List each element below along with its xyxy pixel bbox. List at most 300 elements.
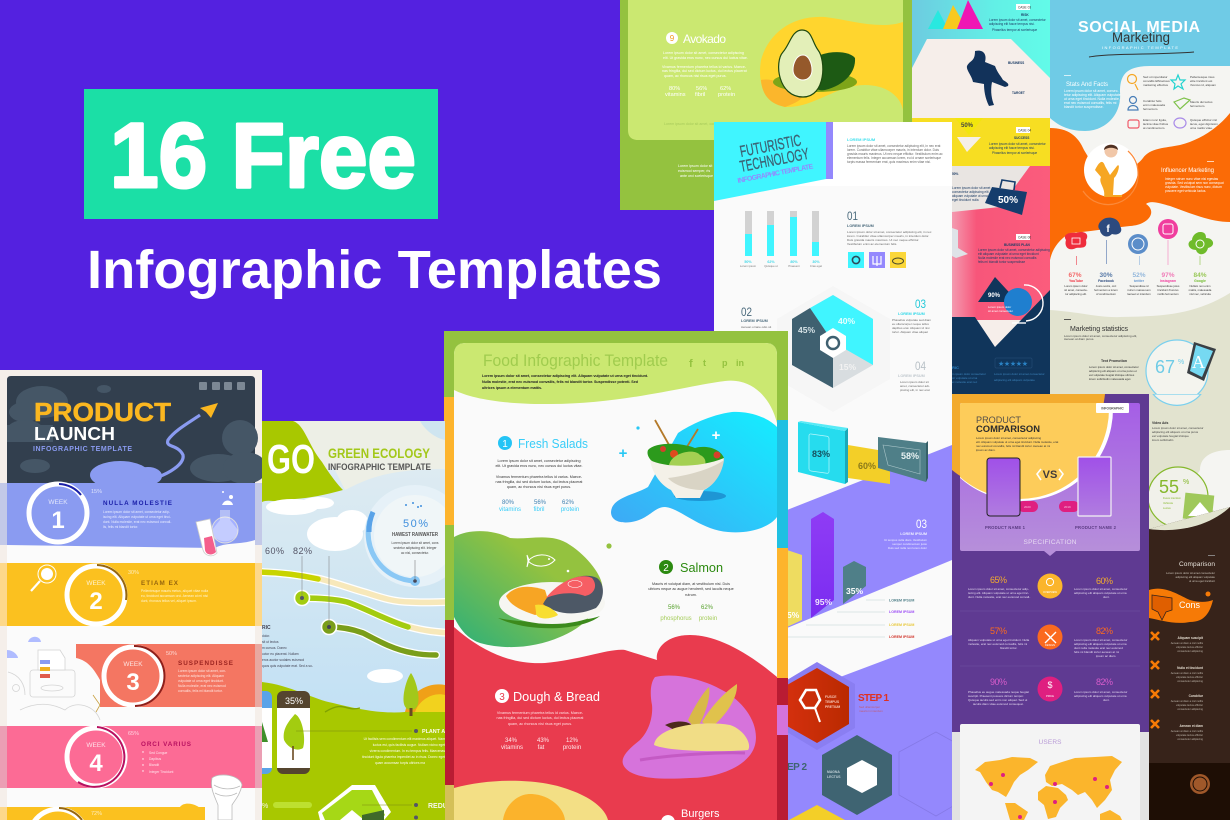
globe: 90% [988,293,1001,299]
business text: adipiscing elit aliquam vulputate [994,378,1035,382]
phone 2: 2019 [1064,505,1071,509]
cons list: consectetur adipiscing [1177,707,1204,711]
intro text: gravida mauris maximus. Ut nec neque efficitur. Vestibulum enim ac [847,152,943,156]
hawest rainwater gauge: Lorem ipsum dolor sit amet, cons [392,541,439,545]
avocado body text: fibril [695,92,705,98]
header: TECHNOLOGY [739,146,811,176]
section 01: 01 [847,209,858,223]
chart: 67 percent circle: 67 [1155,357,1175,377]
header: INFOGRAPHIC TEMPLATE [33,446,132,453]
chart: 67 percent circle: A [1192,352,1205,372]
icon: avocado [773,30,857,97]
green blob [454,531,602,647]
band: week 2: ETIAM EX [141,580,179,587]
hawest rainwater gauge: ac nisl, consectetur. [401,551,429,555]
section 03 lower: semper condimentum justo [892,542,927,546]
section: dough and bread: 34% [505,738,518,744]
intro text: lorem. Curabitur vitae ullamcorper mauris, in interdum dolor. Duis [847,148,939,152]
band: week 4: 65% [128,731,139,737]
heading: social media marketing: INFOGRAPHIC TEMPLATE [1102,45,1178,50]
section: fresh salads: nas fringilla, dui sed dictum luctus, dui lectus placerat [496,480,582,484]
section: dough and bread: 43% [537,738,550,744]
section: dough and bread [495,689,600,751]
section 04 [898,359,930,392]
band: week 3: convallis, felis mi blandit tortor. [178,689,223,693]
section: dough and bread: nas fringilla, dui sed dictum luctus, dui lectus placerat [497,716,583,720]
section 01: Duis gravida mauris maximus. Ut nec neque efficitur. [847,238,919,242]
heading: social media marketing: SOCIAL MEDIA [1078,19,1200,36]
3d bars: 5% [787,610,800,620]
instagram [1157,219,1180,296]
left fragment text: dolor. [262,634,270,638]
band: week 5: 72% [91,811,102,817]
step hexagons: EP 2 [787,762,807,773]
avocado body text: quam, ac rhoncus nisi risus eget purus. [664,74,727,78]
clouds [266,497,403,683]
intro text [847,137,943,164]
stats and facts: Lorem ipsum dolor sit amet, consec- [1064,89,1119,93]
section: dough and bread: vitamins [501,745,523,751]
facts text: Curabitur felis [1143,99,1162,103]
card: 35 percent: 35% [285,696,303,706]
section 03: dapibus erat. Aliquam id nisi [892,326,930,330]
facts text: urna mattis vitae. [1190,126,1213,130]
intro text: Lorem ipsum dolor sit amet, consectetur adipiscing elit, in nec erat [847,144,940,148]
yellow callout: 50 percent: 50% [961,123,974,129]
section: salmon: protein [699,616,717,622]
section 04: 04 [915,359,926,373]
row: design: dunt nulla molestie erat nec euismod [1074,646,1123,650]
line markers and values [265,546,336,634]
facts text: elite tincidunt est [1190,79,1213,83]
comparison card: PRODUCT NAME 2 [1075,525,1117,530]
intro text: LOREM IPSUM [847,137,876,142]
google [1189,232,1213,296]
google: 84% [1193,272,1207,279]
avocado body text: protein [718,92,735,98]
avocado body text: nas fringilla, dui sed dictum luctus, dui lectus placerat [662,69,747,73]
heading: food template: Nulla molestie, erat nec euismod convallis, felis mi blandit tortor. Suspendisse potenti. Sed [482,380,639,384]
band: week 2: WEEK [86,580,106,587]
row: price: PRICE [1046,694,1054,698]
row: price: 82% [1096,677,1113,687]
row: overview: iscing elit. Aliquam vulputate ut urna eget tinc- [968,591,1029,595]
hexagon pie chart [777,286,890,412]
title block [84,89,662,300]
facts text: at condimentum. [1143,126,1165,130]
icon: flask and tube [196,491,238,556]
3d device blocks: 60% [858,461,876,471]
left fragment text: uctor eu placerat. Nullam [262,652,299,656]
phone 1: 2020 [1024,505,1031,509]
business text: CASE 06 [1018,236,1031,240]
marketing statistics [1064,319,1139,381]
business text: Lorem ipsum dolor sit amet, consectetur [989,18,1047,22]
row: design: Lorem ipsum dolor sit amet, consectetur [1074,638,1127,642]
marketing beige [1050,293,1230,395]
red wave [454,627,777,820]
social icons [199,382,245,390]
business text: Lorem ipsum dolor [988,305,1011,309]
67 circle remainder [1153,394,1201,405]
band: week 3: 50% [166,651,177,657]
comparison card: Lorem ipsum dolor sit amet, consectetur adipiscing [976,436,1041,440]
avocado body text: 80% [669,86,680,92]
icon: fish outline [527,555,569,572]
row: overview: 65% [990,575,1007,585]
business text: adipiscing elit fusce tempus nisi. [989,22,1035,26]
business text: RISK [1021,13,1029,17]
heading: food template: t [703,358,706,368]
avocado body text: Lorem ipsum dolor sit amet, consectetur adipiscing [663,51,744,55]
icon: magnifier [31,565,56,591]
heading: food template: p [722,358,728,368]
twitter: twitter [1134,279,1145,283]
band: week 1: 15% [91,489,102,495]
row: design: adipiscing elit aliquam vulputate ut urna [1074,642,1127,646]
comparison card [929,317,1140,556]
intro text: elementum felis. Integer accumsan lorem, eu id ornare scelerisque [847,156,941,160]
marketing statistics: Aenean at diam purus. [1064,337,1094,341]
cons list: Aenean at diam a nisl mollis [1171,641,1204,645]
influencer text: posuere eget vehicula luctus. [1165,189,1206,193]
facts text: Sed ut imperdiatur [1143,75,1168,79]
yellow blob [760,17,903,110]
users map card [960,724,1140,820]
left fragment text [262,625,313,668]
video ads text: adipiscing elit aliquam ut urna purus [1152,430,1199,434]
video ads text: Lorem ipsum dolor sit amet, consectetur [1152,426,1203,430]
band: week 3: Lorem ipsum dolor sit amet, con- [178,669,226,673]
section: fresh salads: fibril [533,507,545,513]
band: week 3: vulputate ut urna eget tincidunt. [178,679,224,683]
panel: business template [912,0,1052,395]
band: week 4 [0,726,262,788]
band: week 1: lis, felis mi blandit tortor. [103,525,138,529]
avocado body text: vitamins [665,92,686,98]
avocado body text: Lorem ipsum dolor sit amet, consectetur [664,122,729,126]
section 03: eu ullamcorper neque tellus [892,322,929,326]
heading: food template: ultrices ipsum a elementum mattis. [482,386,542,390]
comparison heading [1166,555,1215,583]
stats and facts [1064,75,1121,109]
facebook: Facebook [1098,279,1114,283]
purple diagonal bands [787,445,952,820]
youtube: Lorem ipsum dolor [1064,284,1088,288]
chart: 67 percent circle [1145,339,1216,394]
hexagon pie chart: 15% [839,362,856,372]
comparison heading: adipiscing elit aliquam vulputate [1176,575,1215,579]
clouds [7,385,267,484]
influencer text [1161,161,1224,193]
google: Nullam non enim [1190,284,1211,288]
band: week 5 [0,804,255,820]
silhouette [967,51,1008,106]
youtube: tur adipiscing elit. [1065,292,1087,296]
google: Google [1194,279,1206,283]
reduce text [262,802,458,820]
band: week 1 [0,483,262,548]
marketing statistics: est vulputate feugiat tristique ultrices [1089,373,1135,377]
section: salmon: rutrum. [685,593,697,597]
cons list: Curabitur [1189,694,1204,698]
cons badge: Cons [1179,600,1200,610]
row: price: adipiscing elit aliquam vulputate ut urna [1074,694,1127,698]
step hexagons: PRETIUM [825,705,840,709]
icon tiles [848,252,906,268]
business text: CASE 03 [1018,6,1031,10]
side stripes [444,397,788,820]
facebook: of condimentum [1096,292,1117,296]
video ads text: Video Ads [1152,421,1169,425]
band: week 1: NULLA MOLESTIE [103,500,172,507]
heading: food template: in [736,358,744,368]
influencer text: vulputate. Vestibulum risus nunc, dictum [1165,185,1222,189]
section: dough and bread: fat [538,745,545,751]
bar chart: Praesent [788,264,800,268]
facts text: convallis Efficacious [1143,79,1170,83]
comparison card: PRODUCT NAME 1 [985,525,1026,530]
section 03 lower: LOREM IPSUM [900,532,927,536]
google: nisl nec, vehicula [1189,292,1211,296]
marketing statistics: Lorem ipsum dolor sit amet, consectetur [1089,365,1139,369]
comparison card: ipsum ac diam. [976,448,996,452]
phone 1 [987,458,1038,516]
globe [988,285,1043,323]
bar chart: 50% [744,260,752,264]
section: dough and bread: 3 [499,692,505,703]
heading: avocado: Avokado [683,32,726,46]
section 02: 02 [741,305,752,319]
blue blob [611,412,777,532]
step hexagons: STEP 1 [858,693,889,704]
band: week 3: 3 [126,669,140,696]
band: week 4: Blandit [149,763,159,767]
icon: bread [640,684,749,760]
row: overview [968,574,1127,599]
stats and facts: ut urna eget tincidunt. Nulla molestie, [1064,97,1120,101]
row: overview: OVERVIEW [1043,590,1058,594]
facts text: Mauris dui lectus [1190,100,1213,104]
row: overview: adipiscing elit aliquam vulputate ut urna [1074,591,1127,595]
badge: infographic [1096,403,1129,413]
avocado body text: ante orci scelerisque [680,174,713,178]
business text: felis mi blandit tortor suspendisse [978,260,1025,264]
row: overview: dunt. Nulla molestie, erat nec euismod convall- [968,595,1030,599]
users map card: USERS [1038,739,1062,746]
band: week 3: sectetur adipiscing elit. Aliquam [178,674,224,678]
white blob [1190,450,1230,515]
business text: Lorem ipsum dolor sit amet, consectetur [989,142,1047,146]
icon: tree [403,673,419,716]
left fragment text: quos quis vulputate erat. Sed a so- [262,664,313,668]
step hexagons: MAGNA [827,770,840,774]
step hexagons [787,662,972,820]
section: fresh salads: 1 [502,439,508,450]
green ground [262,682,445,820]
youtube: YouTube [1069,279,1083,283]
instagram: tincidunt rhoncus [1157,288,1179,292]
icon: salmon plate [498,576,605,628]
legend lines: LOREM IPSUM [889,610,914,614]
chart: 55 percent [1148,467,1214,527]
cons list: consectetur adipiscing [1177,679,1204,683]
legend lines: LOREM IPSUM [889,598,914,602]
business text: et molestie erat nec [952,380,978,384]
section 03: 03 [915,297,926,311]
3d bars: 35% [846,586,863,596]
left fragment text: m cursus. Donec [262,646,287,650]
heading: food template: Lorem ipsum dolor sit amet, consectetur adipiscing elit. Aliquam vulputate ut urna eget tincidunt. [482,374,648,378]
purple blob [623,675,756,779]
chart: 55 percent: Fusce interdum [1163,496,1181,500]
business text: CASE 04 [1018,128,1031,132]
facts text: fermentum. [1143,107,1158,111]
chart: 55 percent: % [1183,479,1189,486]
3d device blocks: 58% [901,451,919,461]
header [714,122,833,201]
section 03 lower: 03 [916,517,927,531]
section 04: piscing elit, in nec erat [900,388,930,392]
header: LAUNCH [34,424,115,444]
row: design: felis mi blandit tortor aenean at mi [1074,650,1119,654]
header: FUTURISTIC [739,132,803,161]
band: week 4: Integer Tincidunt [149,770,173,774]
green hill top [262,421,343,502]
twitter: Suspendisse id [1130,284,1149,288]
heading: green ecology: GO [267,436,315,482]
bar chart: 62% [767,260,775,264]
avocado body text: 62% [720,86,731,92]
section: fresh salads: Vivamus fermentum pharetra tellus id varius. Maece- [496,475,583,479]
band: week 1: 1 [51,507,65,534]
bar chart: Lorem ipsum [740,264,757,268]
cons list: vulputate lectus efficitur [1176,675,1203,679]
business text: consectetur adipiscing elit [952,190,989,194]
band: week 1: iscing elit. Aliquam vulputate ut urna eget tinci- [103,515,171,519]
cons list: Aliquam suscipit [1177,636,1204,640]
section 02: Aenean ornare odio sit [741,325,771,329]
avocado body text: elit. Ut gravida eros nunc, nec cursus dui luctus vitae. [663,56,748,60]
section 03 lower [884,517,928,550]
step hexagons: TEMPUS [825,700,840,704]
legend lines: LOREM IPSUM [889,635,914,639]
band: week 4: Dapibus [149,757,161,761]
icon: gear badge [1190,774,1210,794]
row: overview: Lorem ipsum dolor sit amet, consectetur adip- [968,587,1029,591]
section 01: lorem. Curabitur vitae ullamcorper mauris, in interdum dolor. [847,234,929,238]
chart: 55 percent: Vehicula [1163,501,1173,505]
spec rows [960,574,1140,706]
section 03: tortor. Aliquam vitae aliquet [892,330,928,334]
business text: sit vulputate ut urna [952,376,978,380]
top band [912,0,1050,78]
section 04: amet, consectetur adi- [900,384,930,388]
band: week 3: WEEK [123,661,143,668]
influencer text: Integer rutrum nunc vitae nisi egestas [1165,177,1219,181]
plant text [296,729,461,765]
section: dough and bread: Dough & Bread [513,689,600,704]
icon: documents sketch [8,650,100,720]
panel: avocado template [620,0,912,210]
business text: BUSINESS [1008,61,1024,65]
twitter: 52% [1132,272,1146,279]
section: fresh salads: protein [561,507,579,513]
video ads text: est vulputate feugiat tristique [1152,434,1189,438]
hawest rainwater gauge: 50% [403,518,428,530]
plant text: viverra condimentum. In eu tempus felis. Maecenas [370,749,445,753]
comparison card: PRODUCT [976,415,1021,426]
comparison card: elit. Aliquam vulputate ut urna eget tincidunt. Nulla molestie, erat [976,440,1058,444]
section: fresh salads: Lorem ipsum dolor sit amet, consectetur adipiscing [497,459,581,463]
heading: avocado [666,32,726,44]
icon: light bulb [211,775,242,820]
instagram: Suspendisse jotus [1157,284,1180,288]
line markers and values: 60% [265,546,284,556]
business text: SUCCESS [1014,136,1029,140]
row: design [968,624,1127,658]
business text: Phasellus tempor at scelerisque [992,151,1037,155]
cons list: vulputate lectus efficitur [1176,645,1203,649]
comparison heading: Lorem ipsum dolor sit amet consectetur [1166,571,1215,575]
panel: social template lower column [1148,394,1230,820]
panel: futuristic technology template [714,122,972,820]
section 04: Lorem ipsum dolor sit [900,380,929,384]
avocado body text: Vivamus fermentum pharetra tellus id varius. Maece- [662,65,747,69]
section 01 [847,209,932,246]
section 01: LOREM IPSUM [847,224,874,228]
badge: infographic: INFOGRAPHIC [1101,406,1124,410]
business text: m ipsum dolor consectetur [952,372,986,376]
section: fresh salads: vitamins [499,507,521,513]
row: overview: dunt. [1103,595,1110,599]
facebook: f [1106,224,1110,235]
instagram: 97% [1161,272,1175,279]
yellow band [912,118,1052,166]
facts text: Quisque efficitur nisl [1190,118,1217,122]
comparison card: SPECIFICATION [1024,539,1077,546]
business text: elit aliquam vulputate ut urna eget tincidunt [978,252,1039,256]
section 03: Phasellus vulputate sed diam [892,318,932,322]
section: salmon: Salmon [680,560,723,575]
panel: green ecology template [255,421,466,820]
left fragment text: sit ut lectus [262,640,279,644]
cons list [1151,632,1204,741]
row: price: suscipit. Praesent posuere dictum tempor. [968,694,1024,698]
facts text: fermentum. [1190,104,1205,108]
row: price: iaculis diam vitae euismod consequat. [973,702,1024,706]
step hexagons: mauris in interdum [859,709,883,713]
facts text: enim malesuada [1143,103,1165,107]
plus marks [606,426,721,549]
plant text: tincidunt ligula pharetra imperdiet ac in risus. Donec eget [362,755,445,759]
line markers and values: 82% [293,546,312,556]
section: dough and bread: 12% [566,738,579,744]
winding road [135,415,200,483]
business text: Nulla molestie erat nec euismod convallis [978,256,1037,260]
youtube: sit amet, consecte- [1064,288,1088,292]
heading: green ecology: INFOGRAPHIC TEMPLATE [328,462,431,473]
orange wave [1050,113,1230,260]
plant text: Ut facilisis sem condimentum elit maximus aliquet. Nam [364,737,445,741]
influencer text: gravida. Sed volutpat sem non consequat [1165,181,1224,185]
row: design: 82% [1096,626,1113,636]
facts icons [1128,74,1190,128]
heading: avocado: 9 [670,34,675,43]
video ads text [1152,421,1203,442]
row: design: 57% [990,626,1007,636]
path on hill [325,707,360,712]
